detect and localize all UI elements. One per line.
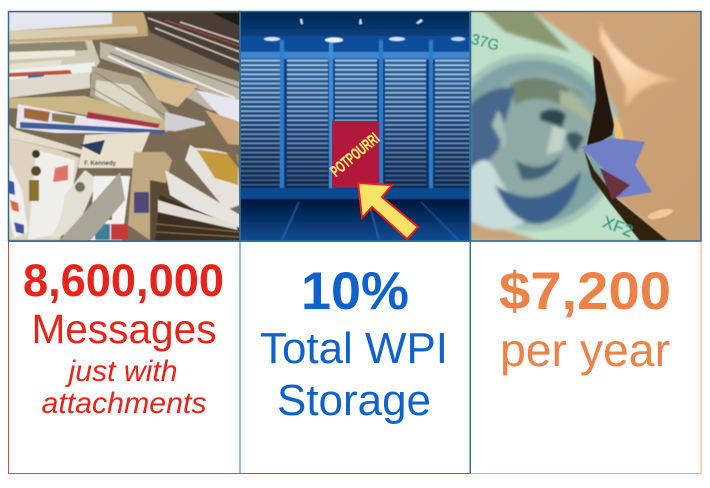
photo: burning hundred dollar bill (471, 12, 700, 240)
highlighted block: POTPOURRI (328, 121, 383, 188)
stat: 10%: 10% (301, 262, 409, 321)
stat: 8,600,000: 8,600,000 (23, 255, 224, 306)
photo: pile of airmail letters (8, 11, 240, 241)
photo frames (8, 12, 701, 241)
stat: $7,200: $7,200 (499, 262, 671, 321)
flame (600, 22, 677, 105)
label: Total WPI: Total WPI (260, 324, 448, 373)
note: just with: just with (64, 355, 178, 388)
panel: cost (470, 12, 702, 474)
label: per year: per year (500, 324, 670, 376)
label: Storage: Storage (277, 376, 431, 425)
arrow: yellow callout (358, 183, 418, 239)
text card: 7,200 dollars (470, 242, 701, 474)
photo: burning hundred dollar bill: XF2 (600, 213, 636, 241)
panel: mail (8, 11, 240, 474)
photo: pile of airmail letters: F. Kennedy (84, 161, 116, 167)
photo: burning hundred dollar bill: 37G (469, 31, 501, 55)
photo: server racks (240, 11, 470, 241)
label: Messages: Messages (32, 306, 216, 352)
highlighted block: POTPOURRI: POTPOURRI (328, 130, 383, 181)
panel: storage (240, 11, 470, 474)
text card: 10 percent (240, 242, 470, 474)
note: attachments: attachments (42, 387, 206, 420)
text card: 8,600,000 messages (8, 242, 240, 474)
